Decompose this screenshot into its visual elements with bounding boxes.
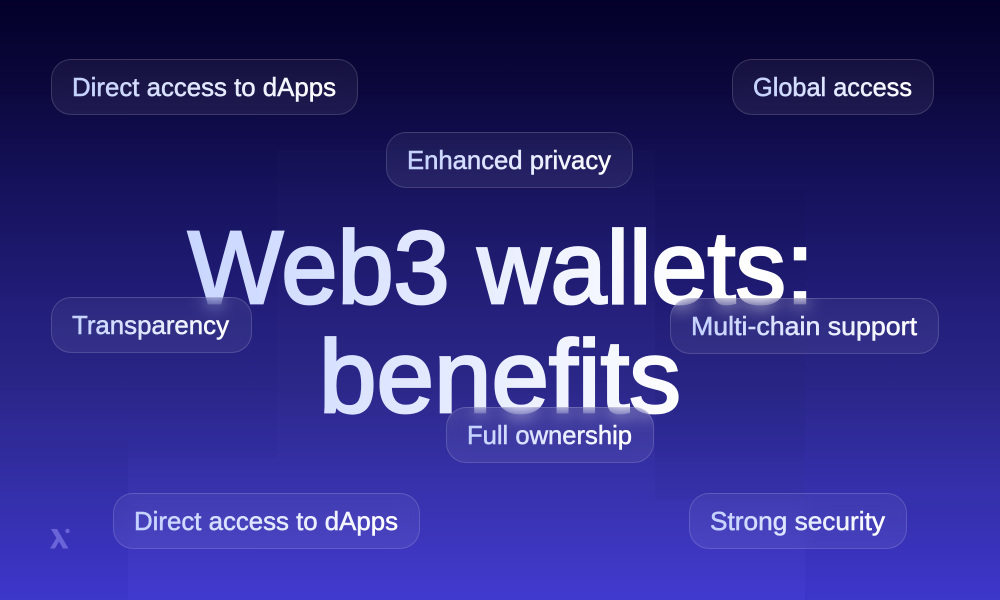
pill: Full ownership [446, 407, 654, 463]
pill: Strong security: Strong security [710, 506, 885, 536]
pill: Full ownership: Full ownership [467, 420, 632, 450]
logo icon [50, 528, 70, 548]
pill: Enhanced privacy [386, 132, 633, 188]
pill: Transparency [51, 297, 252, 353]
pill: Multi-chain support: Multi-chain support [691, 311, 918, 341]
title: Web3 wallets: [188, 210, 814, 325]
pill: Strong security [689, 493, 907, 549]
pill: Global access: Global access [753, 72, 912, 102]
pill: Transparency: Transparency [72, 310, 229, 340]
pill: Direct access to dApps (top): Direct access to dApps [72, 72, 336, 102]
pill: Enhanced privacy: Enhanced privacy [407, 145, 611, 175]
title: benefits [319, 319, 681, 434]
pill: Direct access to dApps (top) [51, 59, 358, 115]
pill: Multi-chain support [670, 298, 939, 354]
pill: Direct access to dApps (bottom) [113, 493, 420, 549]
pill: Direct access to dApps (bottom): Direct access to dApps [134, 506, 398, 536]
pill: Global access [732, 59, 934, 115]
